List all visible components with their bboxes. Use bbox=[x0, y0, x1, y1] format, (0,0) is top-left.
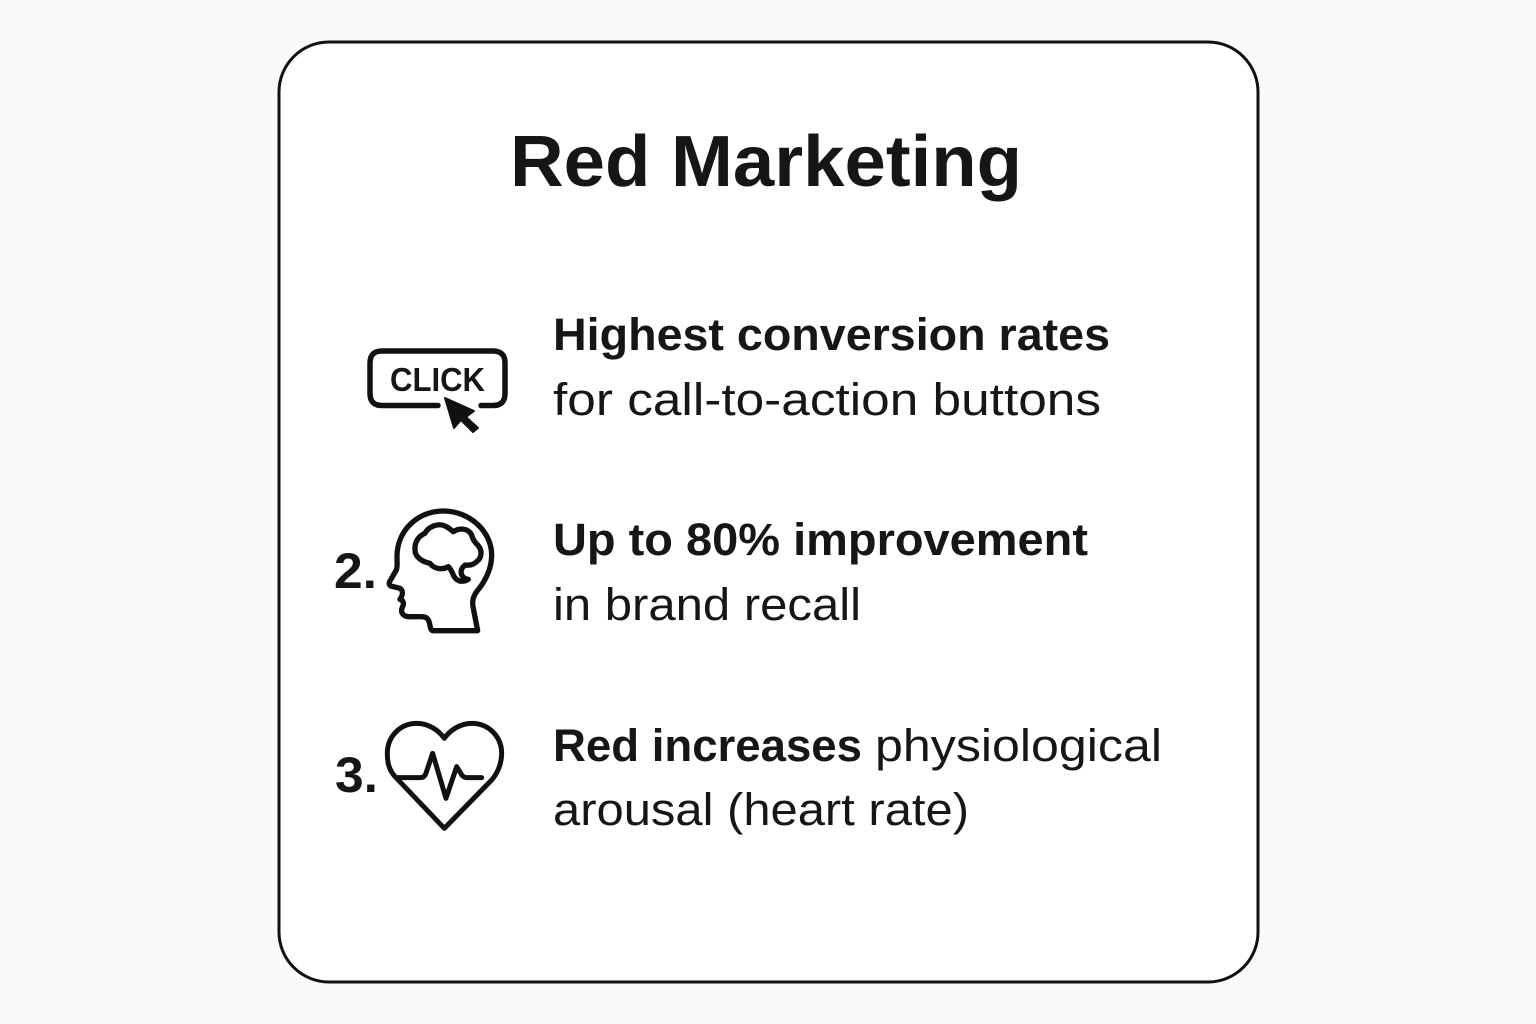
icon: head with brain bbox=[389, 511, 492, 631]
text: brand recall: Up to 80% improvement bbox=[553, 514, 1088, 565]
item 2: brand recall bbox=[334, 511, 1088, 631]
text: conversion rates: for call-to-action buttons bbox=[553, 374, 1101, 425]
text: physiological arousal: physiological bbox=[875, 720, 1162, 771]
panel: card bbox=[279, 42, 1258, 982]
text: conversion rates bbox=[553, 309, 1110, 425]
item 1: click bbox=[370, 309, 1110, 432]
item 3: physiological arousal bbox=[335, 720, 1162, 835]
text: brand recall bbox=[553, 514, 1088, 630]
title: Red Marketing bbox=[510, 122, 1022, 202]
icon: heart with pulse bbox=[387, 723, 502, 828]
text: physiological arousal: arousal (heart rate) bbox=[553, 784, 969, 835]
text: physiological arousal: Red increases bbox=[553, 720, 862, 771]
number 3: 3. bbox=[335, 747, 378, 803]
number 2: 2. bbox=[334, 543, 377, 599]
text: conversion rates: Highest conversion rates bbox=[553, 309, 1110, 360]
icon: click button with cursor bbox=[370, 351, 505, 432]
text: physiological arousal bbox=[553, 720, 1162, 835]
icon: click button with cursor: CLICK bbox=[390, 361, 485, 398]
text: brand recall: in brand recall bbox=[553, 579, 861, 630]
